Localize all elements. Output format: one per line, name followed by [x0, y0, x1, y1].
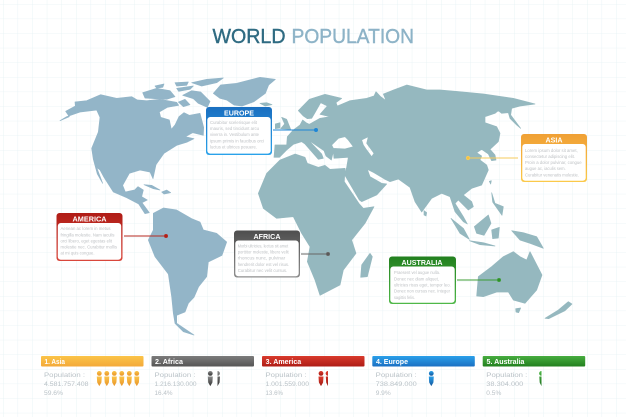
title: POPULATION — [292, 26, 414, 48]
card: Europe: luctus et ultrices posuere. — [210, 145, 257, 150]
card: Africa: AFRICA — [254, 234, 280, 241]
card: America: fringilla molestie. Nam iaculis — [60, 232, 114, 237]
pictogram: people — [318, 371, 328, 386]
North America — [60, 95, 204, 214]
connector: Asia — [466, 156, 518, 160]
card: Africa: Morbi ultricies, lectus sit amet — [238, 244, 289, 248]
stat: Australia: 38.304.000 — [486, 381, 524, 388]
card: Asia: ASIA — [546, 137, 562, 144]
card: Africa — [234, 230, 300, 278]
card: Europe: Curabitur scelerisque elit — [210, 120, 258, 125]
pictogram: person — [429, 371, 434, 386]
card: America: orci libero, eget egestas elit — [60, 238, 113, 243]
connector: Europe — [273, 128, 318, 132]
New Guinea — [512, 231, 543, 248]
stat: America: 3. America — [266, 359, 301, 366]
stat: Africa: 16.4% — [154, 390, 172, 397]
stat: America: Population : — [266, 372, 307, 379]
card: America: at mi quis congue. — [60, 250, 94, 256]
stat: Asia: Population : — [44, 372, 85, 379]
Madagascar — [361, 253, 372, 277]
stat: Africa — [152, 356, 254, 397]
card: America: AMERICA — [72, 216, 106, 223]
stat: Asia: 59.6% — [44, 390, 63, 397]
stat: Australia: 0.5% — [486, 390, 501, 397]
pictogram: people — [208, 371, 220, 386]
card: Europe — [206, 107, 272, 155]
stat: Europe: 4. Europe — [376, 359, 408, 366]
card: Australia — [389, 256, 456, 304]
stat: America — [262, 356, 364, 397]
card: Asia: consectetur adipiscing elit. — [525, 154, 575, 159]
card: Asia: augue ac, iaculis sem. — [525, 166, 566, 171]
title: WORLD — [212, 26, 286, 48]
Arctic islands — [143, 78, 223, 107]
stat: Europe — [372, 356, 475, 397]
card: America: Aenean ac lorem in metus — [60, 226, 110, 231]
card: Asia — [521, 134, 587, 182]
card: Asia: Curabitur venenatis molestie. — [525, 172, 579, 178]
stat: America: 1.001.559.000 — [266, 381, 309, 388]
card: Australia: AUSTRALIA — [402, 260, 442, 267]
Borneo — [474, 215, 491, 235]
stat: Africa: 1.216.130.000 — [154, 381, 197, 388]
pictogram: six people — [97, 371, 139, 386]
Africa — [258, 154, 374, 295]
stat: Europe: 9.9% — [376, 390, 391, 397]
card: America: molestie nec. Curabitur mollis — [60, 244, 117, 250]
card: Europe: mauris, sed tincidunt arcu — [210, 126, 260, 131]
stat: Australia: Population : — [486, 372, 527, 379]
stat: Africa: Population : — [154, 372, 196, 379]
card: Africa: hendrerit dolor est vel risus. — [238, 262, 289, 267]
card: Europe: viverra in. Vestibulum ante — [210, 132, 260, 137]
stat: Australia — [483, 356, 585, 397]
card: Africa: Curabitur nec velit cursus. — [238, 268, 287, 273]
Australia — [477, 252, 542, 303]
title — [212, 26, 414, 48]
card: Asia: Proin a dolor pulvinar, congue — [525, 160, 582, 165]
South America — [148, 208, 227, 335]
stat: Europe: Population : — [376, 372, 417, 379]
map: Eurasia, Africa, Oceania — [258, 85, 572, 319]
card: Africa: porttitor molestie, libero velit — [238, 250, 289, 254]
card: Australia: Praesent vel augue nulla. — [394, 270, 440, 275]
card: America — [56, 213, 122, 261]
card: Europe: EUROPE — [224, 110, 254, 117]
card: Africa: rhoncus nunc, pulvinar — [238, 256, 286, 261]
connector: Australia — [457, 278, 500, 282]
stat: Europe: 738.849.000 — [376, 381, 417, 388]
card: Australia: Donec non cursus nec. Integer — [394, 289, 451, 294]
Tasmania and New Zealand — [516, 302, 572, 319]
card: Australia: Donec nec diam aliquet, — [394, 276, 439, 282]
stat: Asia — [41, 356, 144, 397]
Eurasia — [274, 85, 535, 224]
Indonesia and Philippines — [424, 181, 503, 246]
map: Americas and Greenland — [60, 77, 275, 335]
connector: Africa — [301, 252, 330, 256]
stat: Asia: 1. Asia — [44, 359, 65, 366]
pictogram: partial person — [539, 371, 542, 386]
card: Asia: Lorem ipsum dolor sit amet, — [525, 148, 578, 153]
stat: Australia: 5. Australia — [486, 359, 525, 366]
card: Australia: sagittis felis. — [394, 295, 415, 300]
stat: America: 13.6% — [266, 390, 283, 397]
card: Australia: ultricies risus eget, tempor leo. — [394, 282, 451, 288]
Caribbean islands — [144, 185, 171, 194]
card: Europe: ipsum primis in faucibus orci — [210, 138, 264, 143]
Greenland — [213, 77, 275, 106]
United Kingdom, Ireland and Iceland — [260, 103, 291, 129]
world map — [60, 77, 572, 335]
stat: Asia: 4.581.757.408 — [44, 381, 89, 388]
stat: Africa: 2. Africa — [155, 359, 183, 366]
connector: America — [124, 234, 168, 238]
